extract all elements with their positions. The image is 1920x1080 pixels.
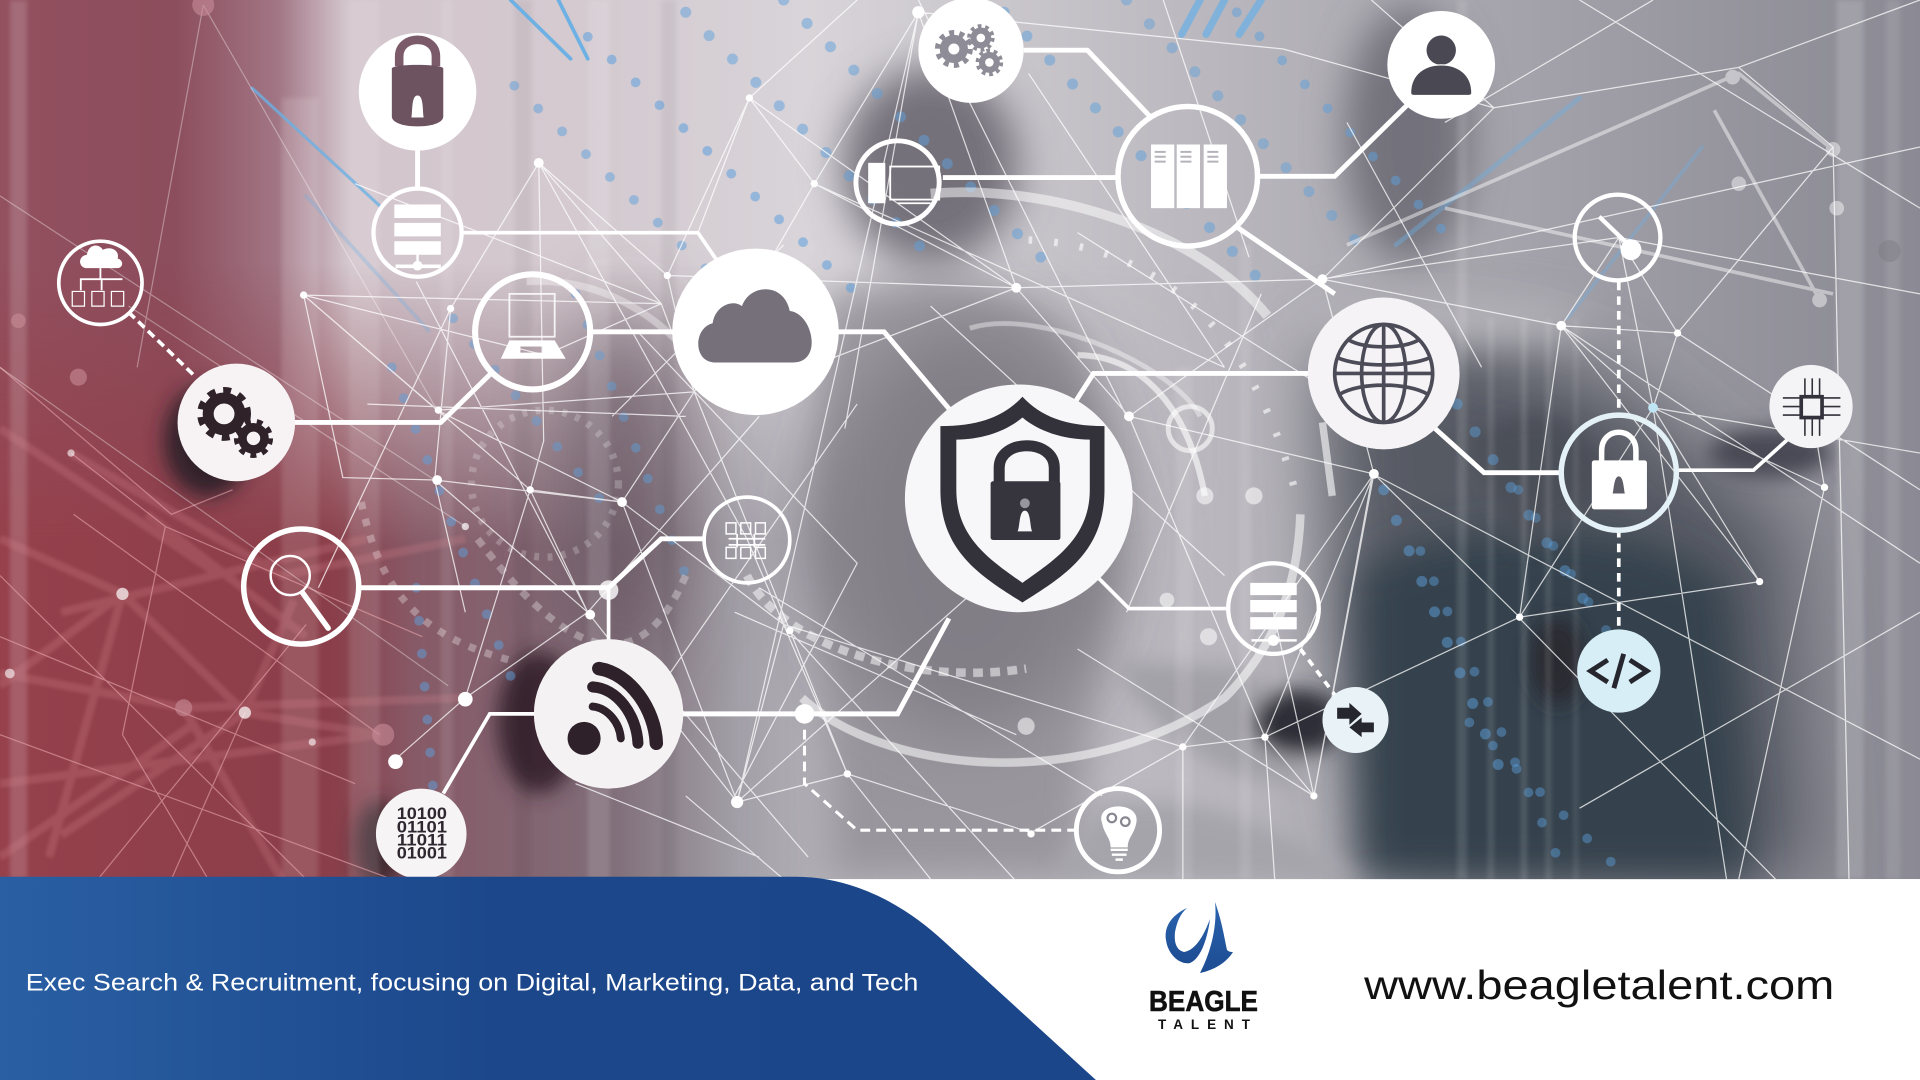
icon: shield node (905, 384, 1133, 612)
icon: gears node (178, 364, 295, 481)
icon: cloud network node (59, 241, 142, 324)
icon: laptop node (475, 274, 590, 389)
thin white network (304, 0, 1920, 882)
connector lines (129, 50, 1790, 830)
faint left network (0, 5, 465, 686)
tagline: Exec Search & Recruitment, focusing on Digital, Marketing, Data, and Tech (26, 970, 918, 997)
icon: monitor node (856, 141, 939, 224)
icon: cloud node (672, 249, 839, 415)
icon: lightbulb node (1076, 789, 1160, 872)
icon: padlock node (359, 33, 476, 151)
icon: code node (1577, 629, 1660, 713)
icon: globe node (1308, 298, 1460, 449)
icon: server node (373, 189, 462, 277)
central dial arcs (361, 192, 1332, 763)
footer white band (0, 879, 1920, 1080)
red network (0, 429, 465, 879)
blue dot fields (392, 0, 1641, 882)
blue streaks (252, 0, 1702, 331)
icon: circuit chip node (1769, 365, 1853, 448)
logo wordmark: BEAGLE (1149, 986, 1258, 1018)
icon: binary node: 01101 (397, 818, 447, 837)
footer blue panel (0, 877, 1096, 1080)
icon: server racks node (1118, 107, 1258, 246)
icon: arrows node (1322, 687, 1389, 753)
icon: padlock ring node (1561, 415, 1676, 530)
icon: binary node (376, 789, 467, 879)
logo subtitle: TALENT (1158, 1017, 1251, 1032)
icon: binary node: 01001 (397, 843, 447, 862)
icon: key node (1575, 195, 1660, 280)
icon: wifi node (534, 639, 683, 789)
icon: magnifier node (244, 529, 359, 644)
icon: binary node: 10100 (397, 804, 447, 823)
website: www.beagletalent.com (1363, 962, 1834, 1008)
blurred figures (164, 6, 1831, 889)
icon: person node (1387, 11, 1495, 119)
icon: database server node (1228, 563, 1319, 654)
logo (1149, 902, 1258, 1032)
icon: circuit ring node (704, 497, 790, 583)
icon: binary node: 11011 (397, 831, 447, 850)
logo mark (1166, 902, 1233, 973)
icon: gears node top (918, 0, 1024, 103)
